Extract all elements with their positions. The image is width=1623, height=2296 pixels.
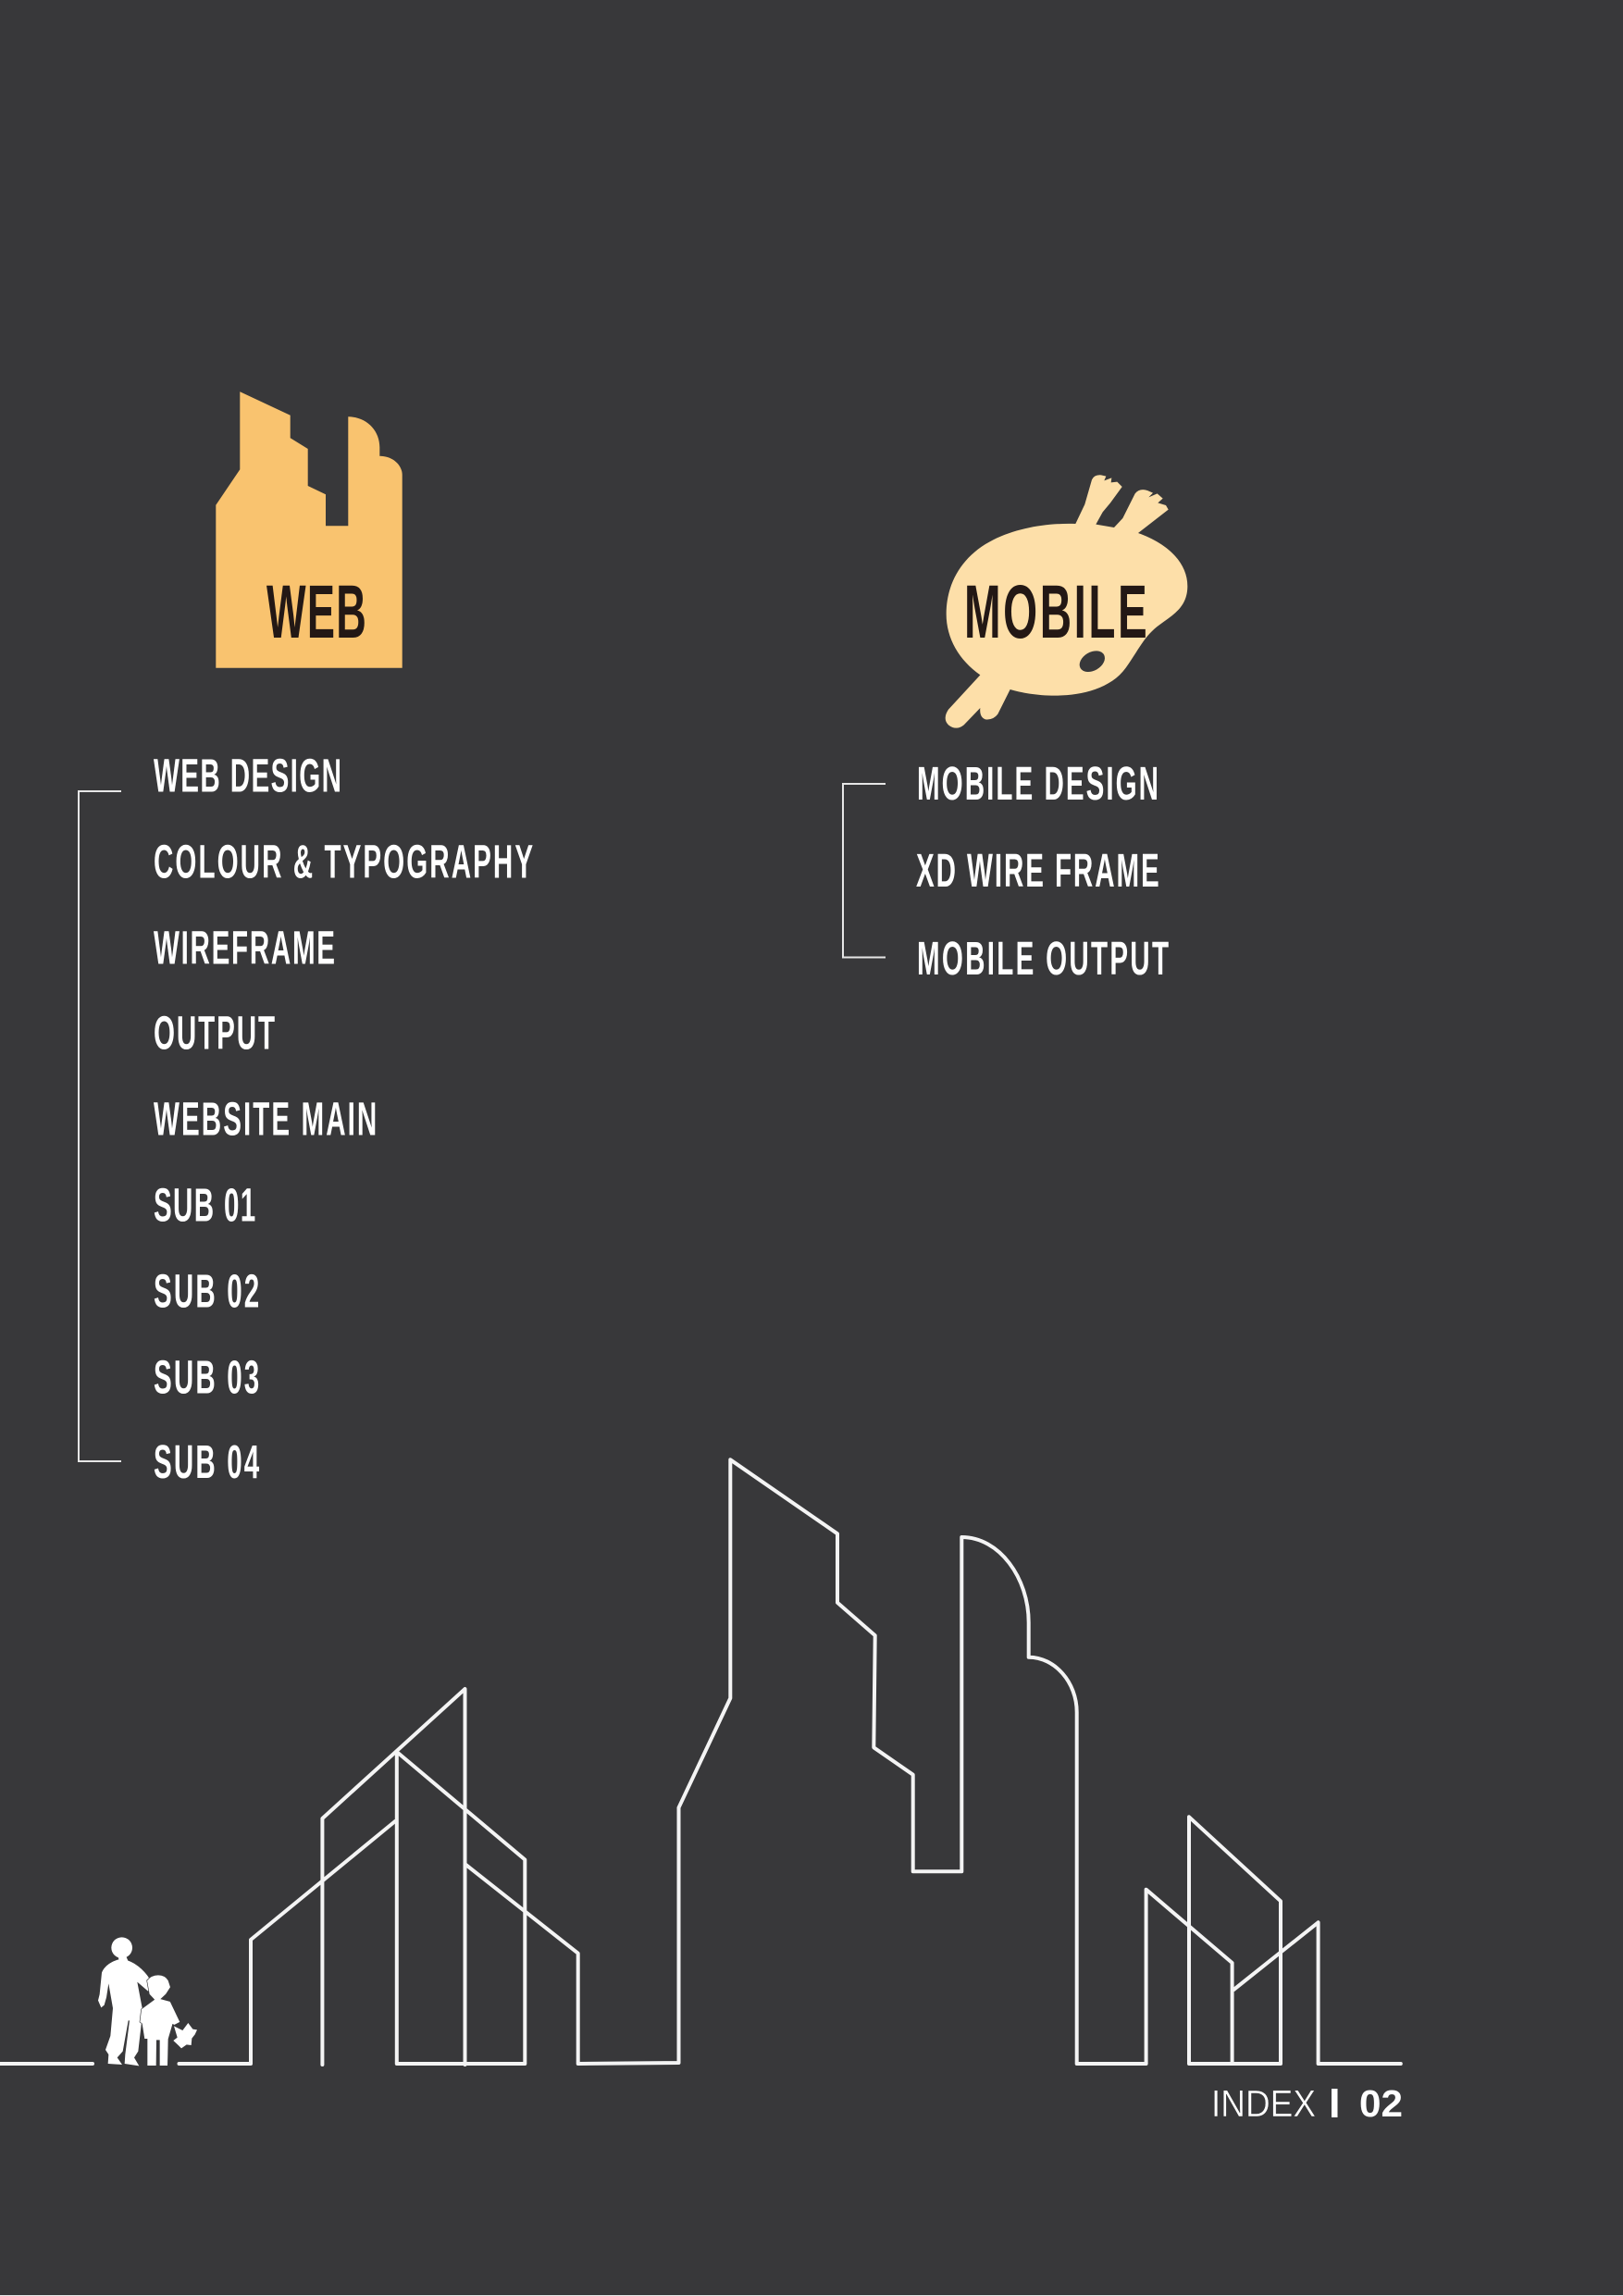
left building outline bbox=[180, 1821, 395, 2064]
list item: web design: WEB DESIGN bbox=[154, 749, 341, 802]
ground line left bbox=[0, 2062, 93, 2066]
icon: mobile paint palette with brushes bbox=[946, 475, 1187, 728]
teddy bear bbox=[173, 2023, 197, 2048]
right end building and ground line bbox=[1233, 1922, 1401, 2064]
list item: website main: WEBSITE MAIN bbox=[154, 1092, 377, 1146]
centre block outline bbox=[397, 1752, 525, 2064]
separator bar bbox=[1332, 2089, 1338, 2117]
list item: sub 02: SUB 02 bbox=[154, 1264, 259, 1318]
list item: wireframe: WIREFRAME bbox=[154, 921, 335, 974]
tall pointed building outline bbox=[322, 1689, 465, 2065]
bracket: mobile list bbox=[843, 784, 886, 957]
heading: mobile: MOBILE bbox=[964, 570, 1147, 654]
page label: index 02 bbox=[1211, 2082, 1403, 2125]
list item: sub 04: SUB 04 bbox=[154, 1435, 259, 1488]
list item: mobile design: MOBILE DESIGN bbox=[917, 757, 1158, 810]
text block: web list bbox=[154, 749, 533, 1488]
icon: web city building bbox=[216, 391, 403, 668]
panel: mobile section bbox=[843, 475, 1187, 985]
label text: index: INDEX bbox=[1211, 2082, 1316, 2125]
list item: sub 03: SUB 03 bbox=[154, 1350, 259, 1404]
page number: 02 bbox=[1359, 2082, 1403, 2125]
right block outline bbox=[1189, 1817, 1281, 2064]
panel: web section bbox=[79, 391, 533, 1488]
adult figure bbox=[98, 1937, 152, 2066]
list item: mobile output: MOBILE OUTPUT bbox=[917, 932, 1169, 985]
list item: xd wire frame: XD WIRE FRAME bbox=[916, 844, 1159, 897]
bracket: web list bbox=[79, 791, 121, 1461]
heading: web: WEB bbox=[266, 570, 366, 655]
text block: mobile list bbox=[916, 757, 1169, 985]
icon: adult and child silhouette with teddy bbox=[98, 1937, 197, 2066]
list item: colour and typography: COLOUR & TYPOGRAPHY bbox=[154, 835, 533, 888]
list item: output: OUTPUT bbox=[154, 1006, 275, 1060]
list item: sub 01: SUB 01 bbox=[154, 1178, 255, 1232]
illustration: line-art city skyline bbox=[0, 1459, 1401, 2065]
central tower skyline outline bbox=[466, 1459, 1233, 2064]
child figure bbox=[140, 1975, 180, 2066]
